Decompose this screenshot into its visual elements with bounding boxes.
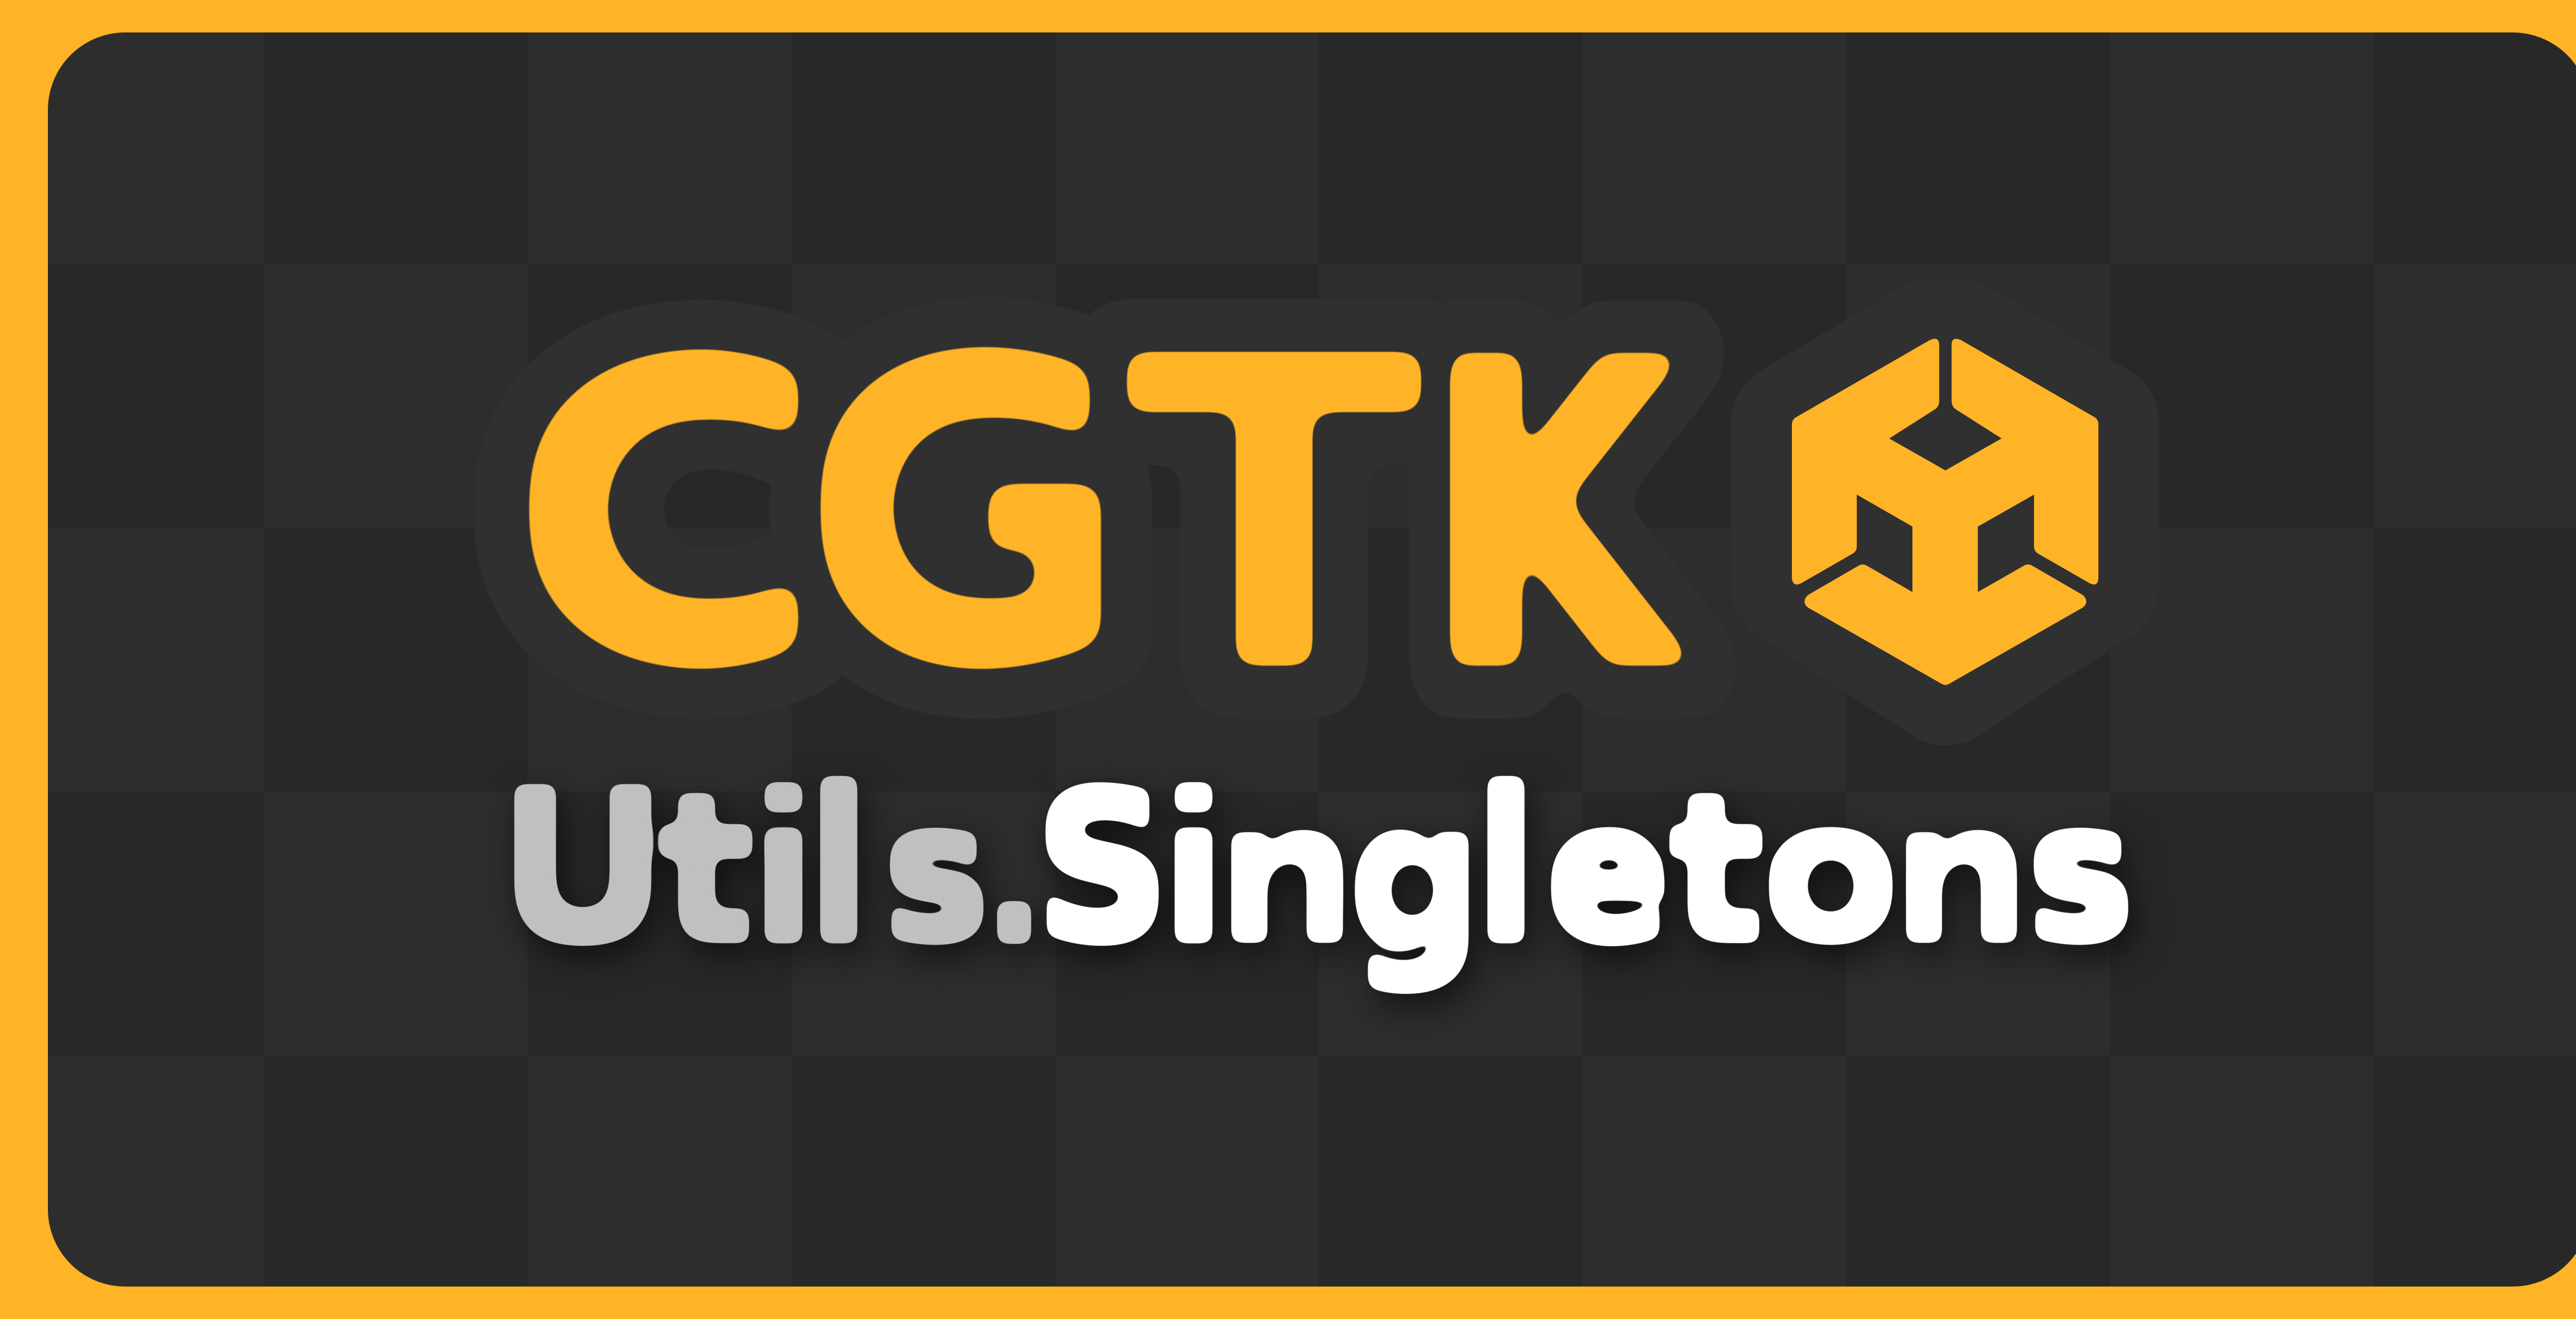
subtitle: Utils.Singletons (495, 733, 2137, 997)
subtitle part: Singletons: l (1469, 739, 1543, 996)
subtitle part: Singletons: n (1215, 766, 1358, 982)
subtitle part: Singletons (1032, 739, 2137, 996)
subtitle part: Utils.: s (880, 763, 992, 982)
subtitle part: Singletons: s (2024, 763, 2137, 983)
title outline halo: K (1425, 269, 1694, 767)
subtitle part: Singletons: t (1667, 753, 1767, 986)
subtitle part: Utils.: l (802, 739, 875, 996)
title: CGTK: C (502, 281, 832, 751)
icon: cube logo (1792, 339, 2098, 685)
subtitle part: Singletons: i (1157, 747, 1231, 994)
title outline halo: T (1121, 265, 1430, 768)
title outline halo: C (502, 281, 832, 751)
subtitle part: Utils.: U (495, 749, 671, 987)
title outline halo (502, 265, 1694, 768)
icon outline halo (1792, 340, 2098, 685)
title: CGTK (502, 265, 1694, 768)
subtitle part: Utils.: t (658, 753, 756, 986)
subtitle part: Singletons: o (1760, 762, 1901, 983)
title: CGTK: K (1425, 269, 1694, 767)
title: CGTK: T (1121, 265, 1430, 768)
subtitle part: Singletons: e (1544, 762, 1673, 984)
subtitle part: Utils.: . (977, 733, 1051, 997)
subtitle part: Singletons: n (1890, 767, 2032, 983)
subtitle part: Utils.: i (747, 747, 821, 994)
subtitle part: Utils. (495, 733, 1051, 997)
subtitle part: Singletons: S (1032, 750, 1173, 986)
title outline halo: G (795, 279, 1136, 752)
subtitle part: Singletons: g (1347, 760, 1484, 993)
title: CGTK: G (795, 279, 1136, 752)
